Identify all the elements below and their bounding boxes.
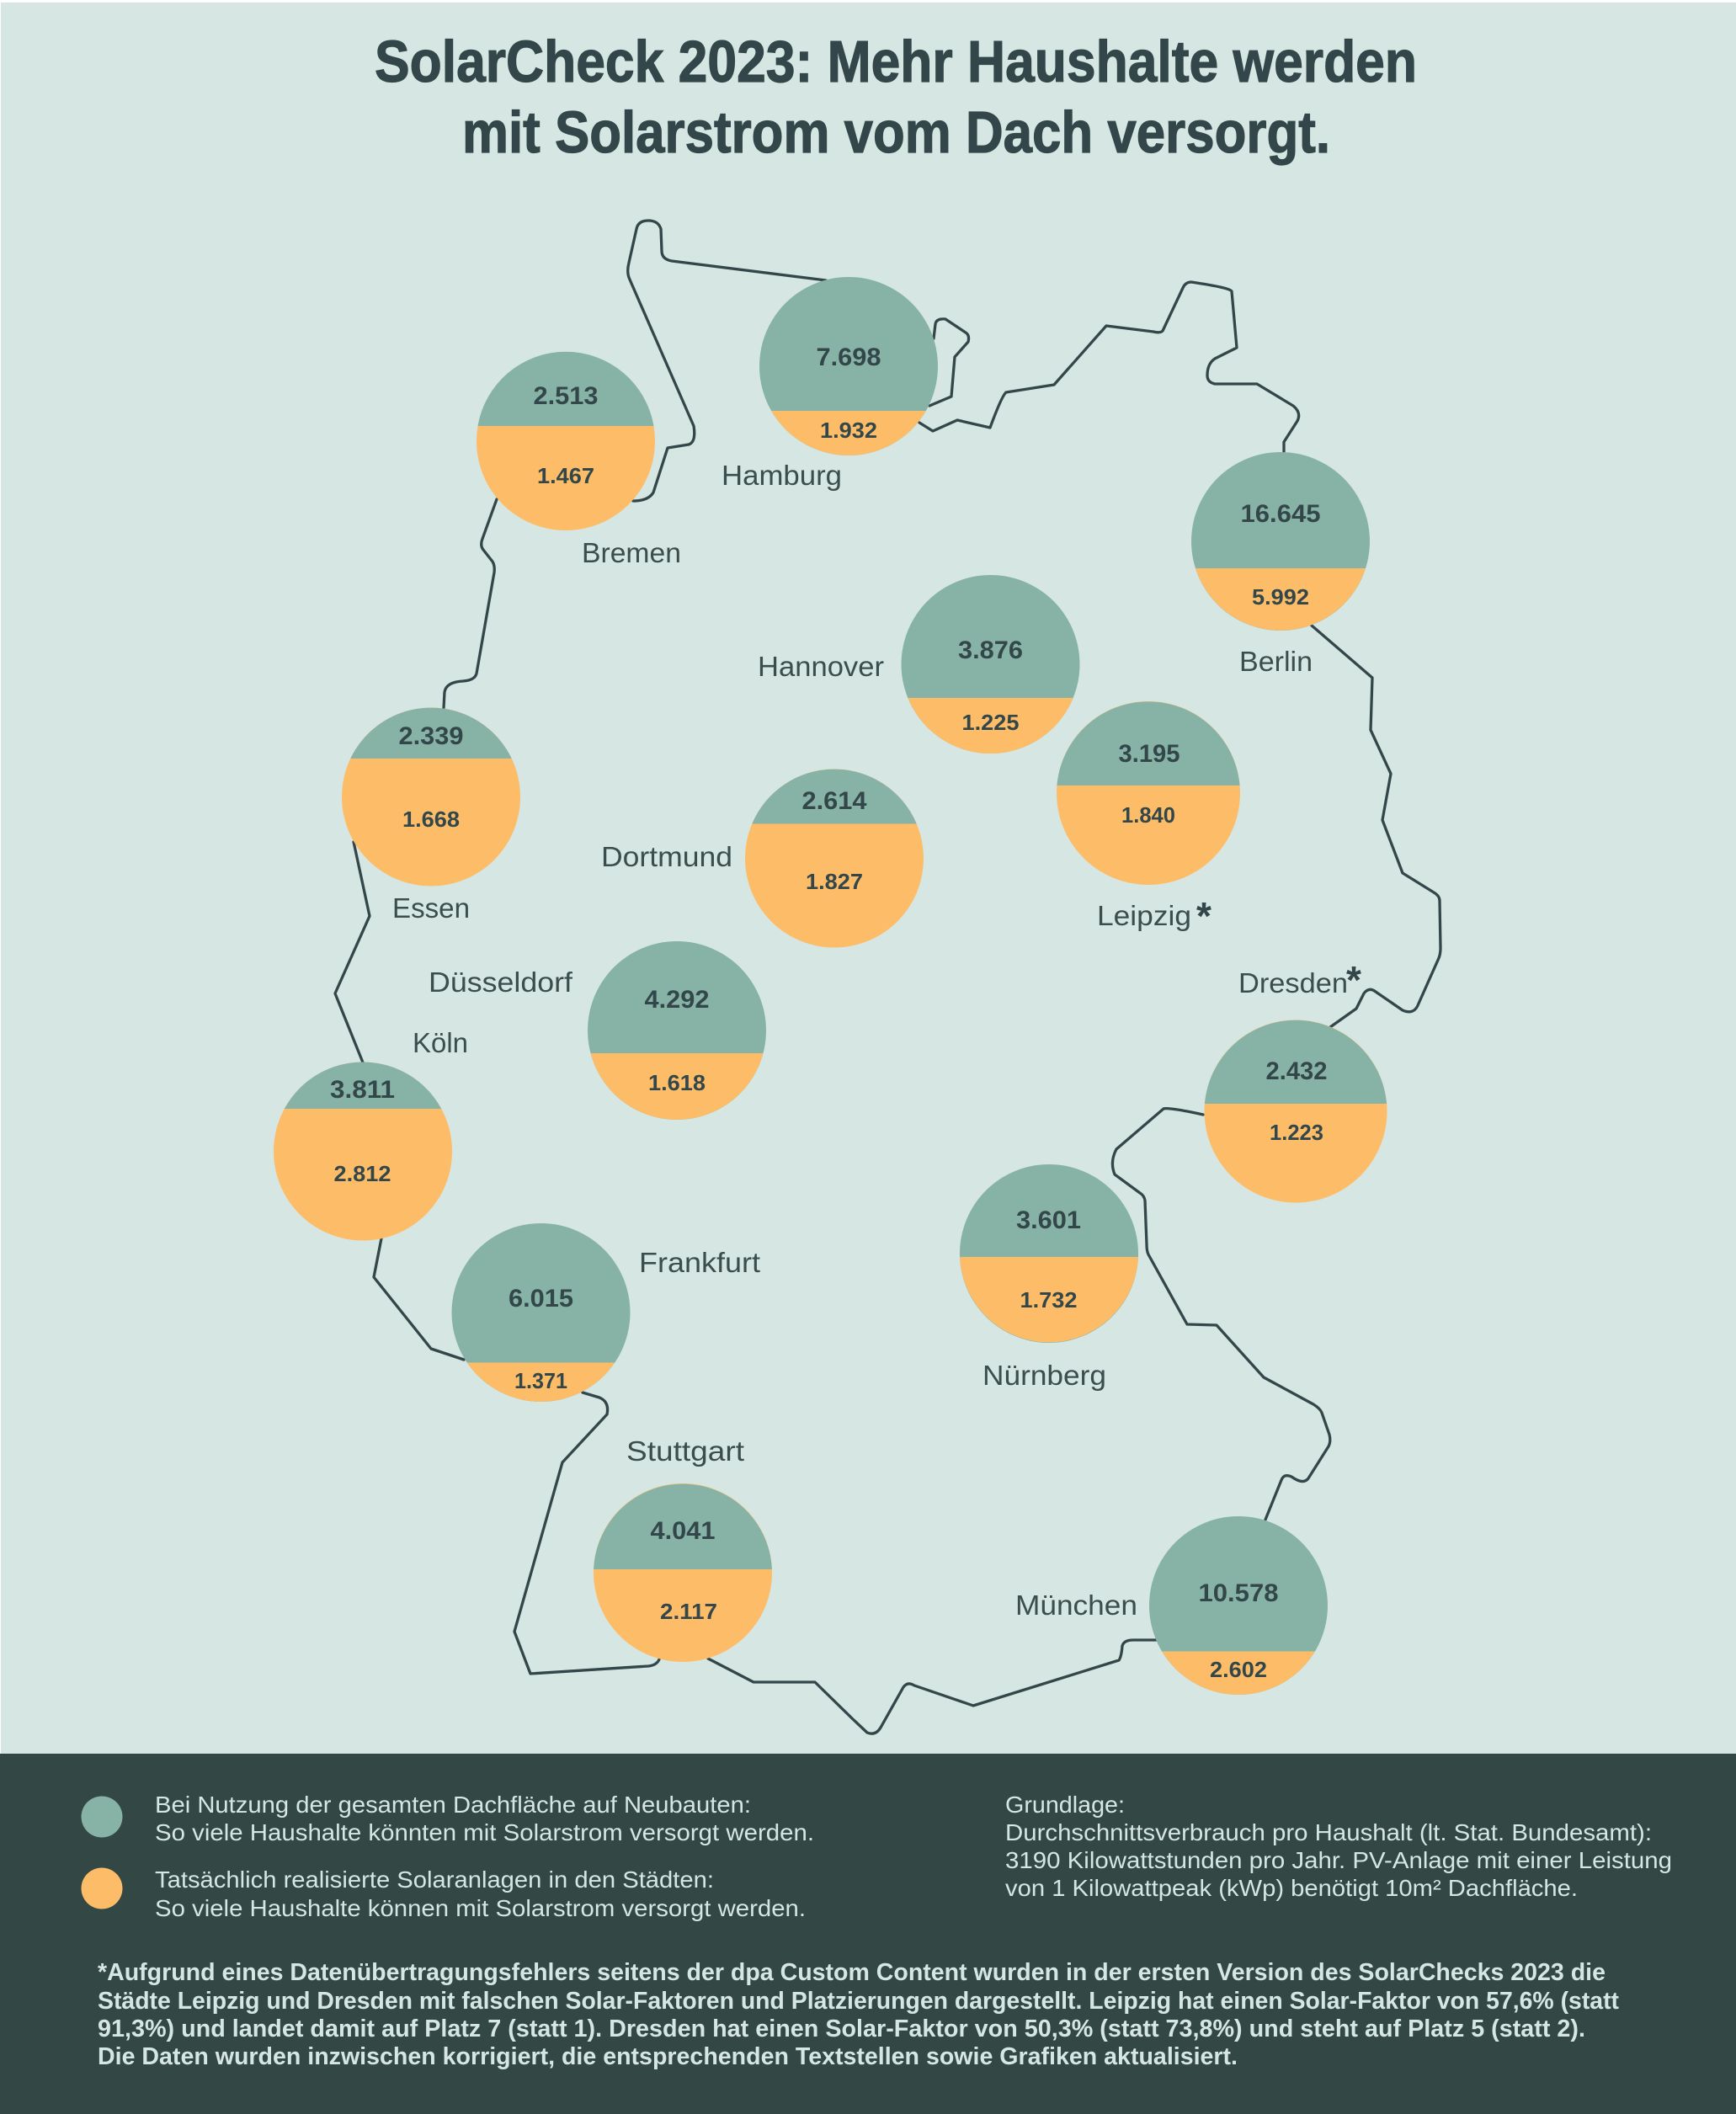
bubble: Köln: 3.811 bbox=[330, 1076, 395, 1104]
bubble: Essen: 2.339 bbox=[399, 722, 463, 750]
bubble: Hamburg bbox=[722, 277, 938, 491]
bubble: Düsseldorf bbox=[429, 941, 766, 1120]
legend: potential: So viele Haushalte könnten mit Solarstrom versorgt werden. bbox=[155, 1819, 814, 1845]
map outline of Germany bbox=[335, 221, 1440, 1733]
text block: correction footnote: Städte Leipzig und Dresden mit falschen Solar-Faktoren und Platzierungen dargestellt. Leipzig hat einen Solar-Faktor von 57,6% (statt bbox=[98, 1988, 1619, 2015]
bubble: Hamburg: 1.932 bbox=[820, 418, 877, 443]
bubble: Dortmund bbox=[601, 769, 924, 948]
bubble: Düsseldorf: 4.292 bbox=[645, 986, 709, 1014]
bubble: Düsseldorf: Düsseldorf bbox=[429, 966, 573, 998]
legend: realised: Tatsächlich realisierte Solaranlagen in den Städten: bbox=[155, 1866, 714, 1893]
text block: basis of calculation: von 1 Kilowattpeak (kWp) benötigt 10m² Dachfläche. bbox=[1005, 1875, 1578, 1901]
text block: correction footnote bbox=[98, 1959, 1619, 2070]
bubble: Bremen bbox=[477, 352, 681, 568]
bubble: Hamburg: Hamburg bbox=[722, 460, 842, 491]
text block: correction footnote: *Aufgrund eines Datenübertragungsfehlers seitens der dpa Custom Content wurden in der ersten Version des SolarChecks 2023 die bbox=[98, 1959, 1606, 1986]
text block: basis of calculation: 3190 Kilowattstunden pro Jahr. PV-Anlage mit einer Leistung bbox=[1005, 1847, 1672, 1873]
bubble: München bbox=[1015, 1516, 1328, 1695]
bubble: Leipzig: Leipzig bbox=[1097, 900, 1191, 931]
bubble: Nürnberg bbox=[960, 1164, 1138, 1391]
bubble: Köln: Köln bbox=[413, 1027, 468, 1058]
legend: realised bbox=[81, 1866, 806, 1921]
text block: correction footnote: 91,3%) und landet damit auf Platz 7 (statt 1). Dresden hat einen Solar-Faktor von 50,3% (statt 73,8%) und steht auf Platz 5 (statt 2). bbox=[98, 2015, 1585, 2042]
bubble: Hannover bbox=[758, 575, 1079, 753]
bubble: Hannover: 1.225 bbox=[961, 710, 1019, 735]
bubble: Hamburg: 7.698 bbox=[817, 343, 881, 371]
bubble: Düsseldorf: 1.618 bbox=[648, 1070, 706, 1095]
bubble: Köln: 2.812 bbox=[333, 1161, 391, 1186]
footer panel bbox=[0, 1754, 1736, 2114]
bubble: Dresden: * bbox=[1346, 958, 1361, 1002]
bubble: Dortmund: 2.614 bbox=[801, 787, 867, 815]
bubble: Stuttgart: Stuttgart bbox=[626, 1435, 744, 1467]
bubble: Köln bbox=[274, 1027, 468, 1241]
bubble: Hannover: Hannover bbox=[758, 651, 884, 682]
text block: correction footnote: Die Daten wurden inzwischen korrigiert, die entsprechenden Textstellen sowie Grafiken aktualisiert. bbox=[98, 2043, 1238, 2070]
bubble: Berlin: 5.992 bbox=[1252, 584, 1309, 610]
bubble: Bremen: Bremen bbox=[582, 537, 681, 568]
bubble: Leipzig: 3.195 bbox=[1118, 740, 1180, 768]
text block: basis of calculation: Durchschnittsverbrauch pro Haushalt (lt. Stat. Bundesamt): bbox=[1005, 1819, 1652, 1845]
bubble: Bremen: 1.467 bbox=[537, 463, 594, 488]
bubble: Dresden: 1.223 bbox=[1270, 1120, 1323, 1145]
bubble: Stuttgart: 4.041 bbox=[650, 1517, 716, 1545]
bubble: Nürnberg: 1.732 bbox=[1020, 1287, 1078, 1313]
bubble: Essen bbox=[342, 707, 520, 924]
bubble: Frankfurt bbox=[451, 1223, 760, 1402]
bubble: Bremen: 2.513 bbox=[534, 382, 598, 410]
bubble: München: 10.578 bbox=[1199, 1579, 1278, 1607]
bubble: München: München bbox=[1015, 1589, 1137, 1621]
bubble: Leipzig: 1.840 bbox=[1121, 802, 1175, 828]
title: mit Solarstrom vom Dach versorgt. bbox=[462, 99, 1330, 165]
title bbox=[375, 29, 1417, 165]
legend: potential: Bei Nutzung der gesamten Dachfläche auf Neubauten: bbox=[155, 1792, 751, 1818]
bubble: Berlin: Berlin bbox=[1239, 646, 1313, 677]
bubble: Leipzig bbox=[1057, 701, 1240, 938]
bubble: Dortmund: Dortmund bbox=[601, 841, 732, 872]
bubble: Stuttgart bbox=[594, 1435, 772, 1662]
bubble: Dortmund: 1.827 bbox=[806, 869, 863, 894]
bubble: Stuttgart: 2.117 bbox=[660, 1599, 717, 1624]
bubble: München: 2.602 bbox=[1210, 1657, 1267, 1682]
legend: potential bbox=[81, 1792, 814, 1845]
bubble: Dresden bbox=[1204, 958, 1387, 1202]
bubble: Dresden: Dresden bbox=[1238, 967, 1348, 998]
bubble: Nürnberg: Nürnberg bbox=[982, 1360, 1106, 1391]
text block: basis of calculation: Grundlage: bbox=[1005, 1792, 1125, 1818]
bubble: Dresden: 2.432 bbox=[1266, 1057, 1327, 1085]
bubble: Essen: Essen bbox=[392, 892, 470, 924]
bubble: Frankfurt: Frankfurt bbox=[639, 1247, 760, 1278]
bubble: Frankfurt: 6.015 bbox=[509, 1285, 573, 1313]
text block: basis of calculation bbox=[1005, 1792, 1672, 1901]
title: SolarCheck 2023: Mehr Haushalte werden bbox=[375, 29, 1417, 94]
bubble: Essen: 1.668 bbox=[402, 807, 460, 832]
bubble: Nürnberg: 3.601 bbox=[1016, 1206, 1081, 1234]
bubble: Leipzig: * bbox=[1196, 894, 1211, 938]
legend: realised: So viele Haushalte können mit Solarstrom versorgt werden. bbox=[155, 1895, 806, 1921]
bubble: Hannover: 3.876 bbox=[958, 636, 1023, 664]
bubble: Berlin: 16.645 bbox=[1241, 500, 1320, 528]
bubble: Berlin bbox=[1191, 452, 1370, 677]
bubble: Frankfurt: 1.371 bbox=[514, 1368, 567, 1393]
